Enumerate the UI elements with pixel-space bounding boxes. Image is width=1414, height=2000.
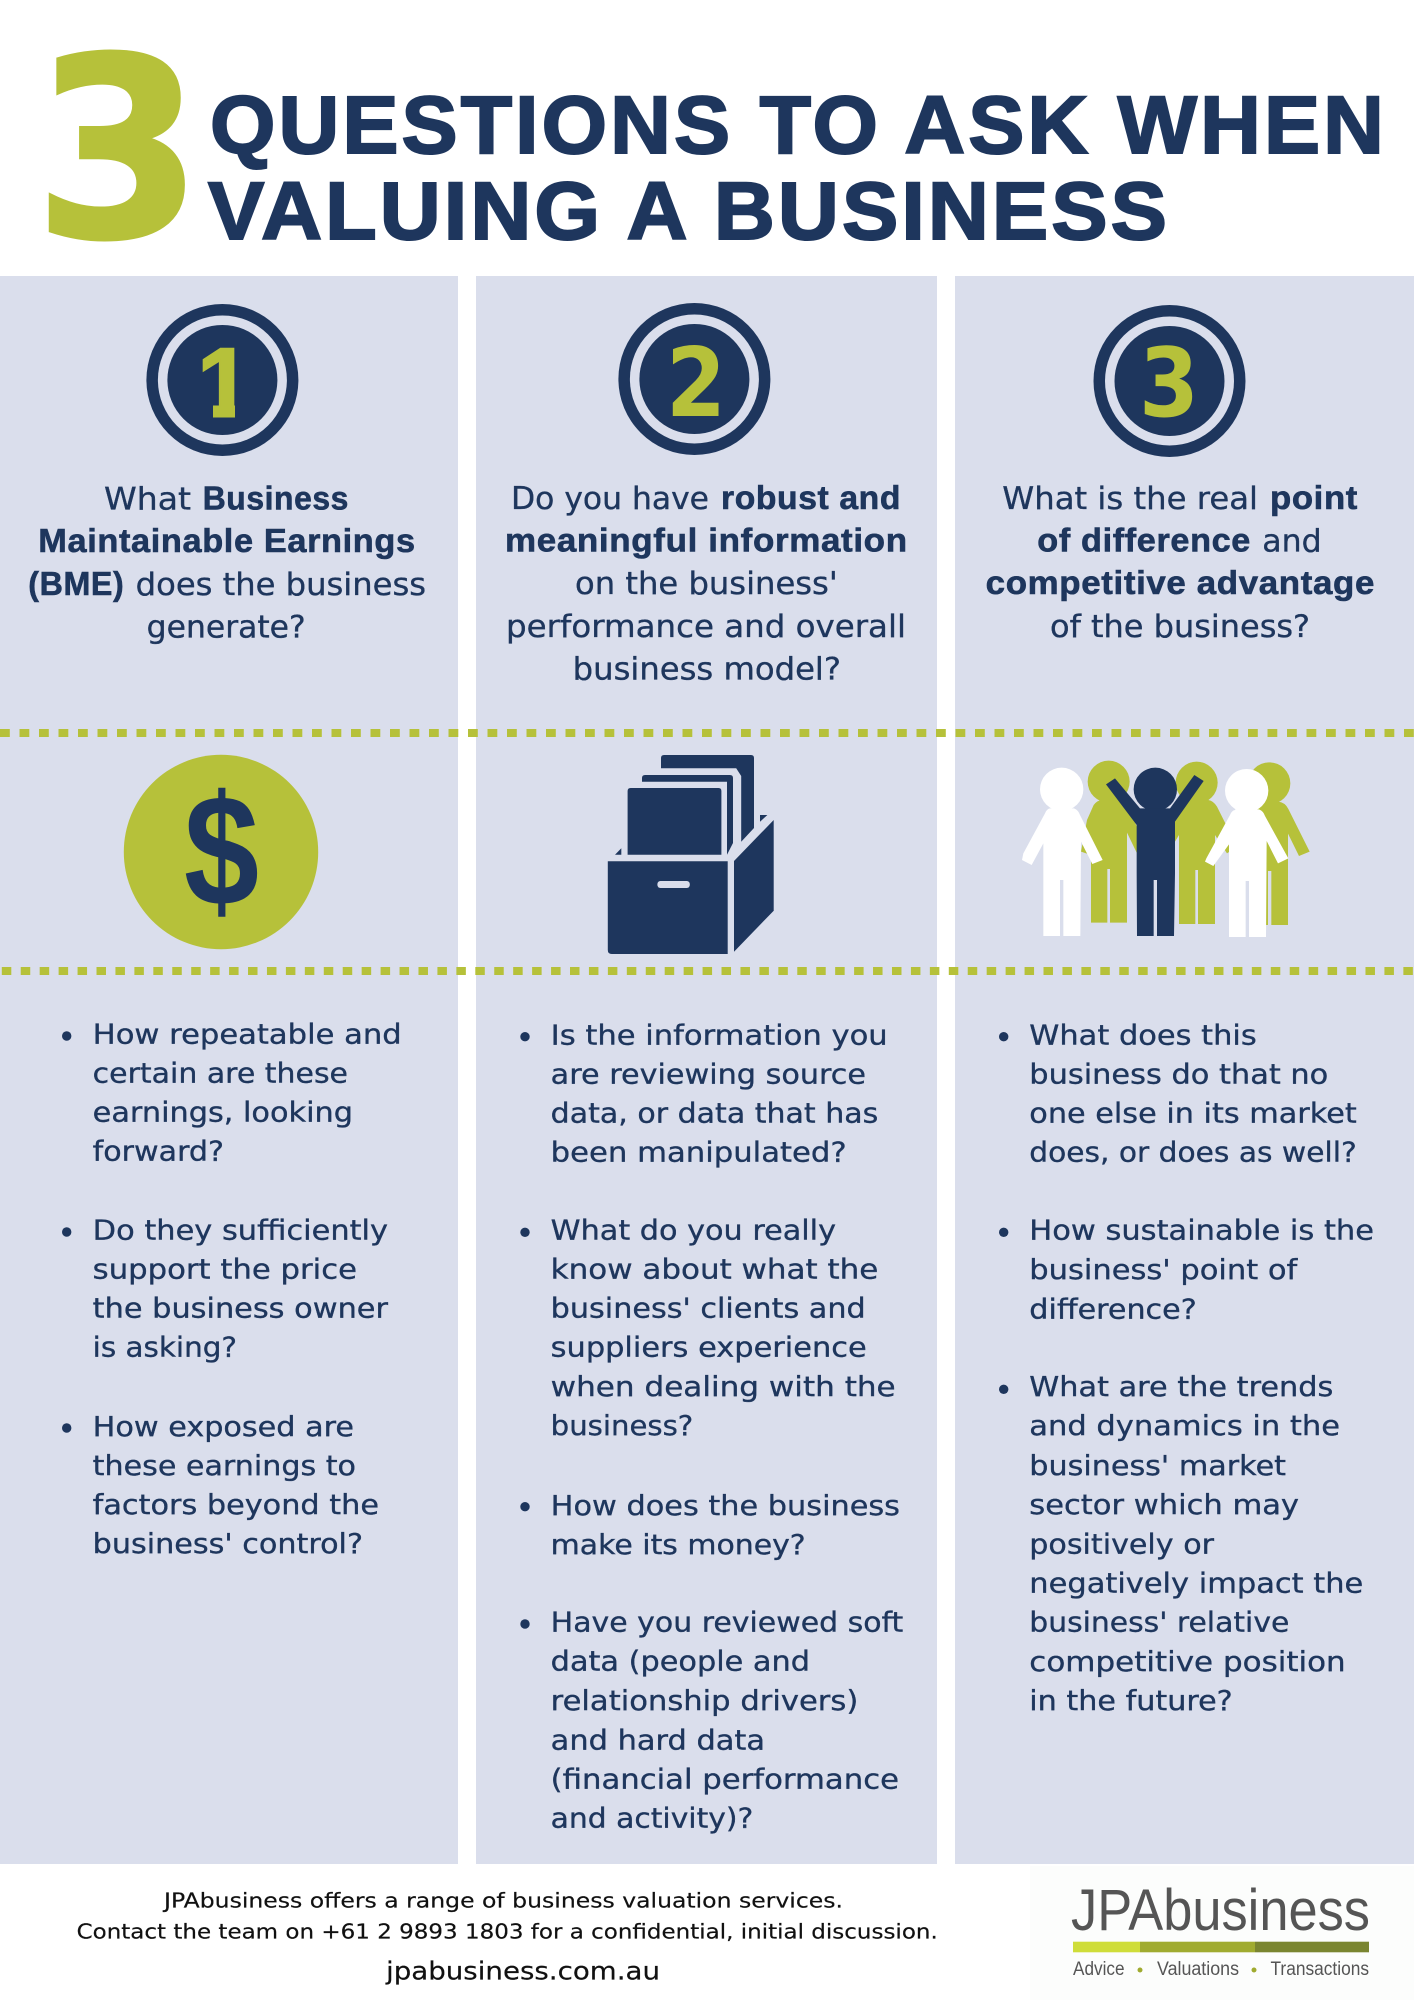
question 3 text: of the business? — [1050, 609, 1310, 645]
bullet list 2: What do you really — [551, 1214, 836, 1247]
drawer handle — [657, 881, 690, 888]
question 2 text: performance and overall — [506, 609, 906, 645]
logo: JPAbusiness: Transactions — [1270, 1959, 1369, 1980]
panel: question 1 — [0, 276, 458, 1864]
person: back centre — [1169, 762, 1237, 924]
question 1 text: Maintainable Earnings — [38, 522, 416, 559]
bullet list 2: Is the information you — [551, 1019, 888, 1052]
question 3 text: point — [1270, 479, 1358, 516]
back file — [661, 755, 754, 842]
left tab — [615, 848, 621, 855]
bullet list 2 — [520, 1019, 903, 1834]
bullet list 3 — [999, 1018, 1374, 1717]
question 2 text: meaningful information — [505, 522, 908, 558]
bullet list 2: Have you reviewed soft — [551, 1606, 903, 1639]
front file — [628, 788, 721, 855]
bullet list 3: competitive position — [1029, 1645, 1346, 1678]
bullet list 1: business' control? — [93, 1527, 363, 1560]
bullet list 1: factors beyond the — [93, 1488, 379, 1521]
icon: number 3 badge: 3 — [1139, 329, 1199, 439]
bullet list 3: What are the trends — [1029, 1370, 1333, 1403]
icon: number 2 badge: 2 — [666, 329, 726, 439]
bullet list 2: when dealing with the — [551, 1370, 896, 1403]
bullet list 3: and dynamics in the — [1029, 1409, 1340, 1442]
bullet list 1: certain are these — [93, 1057, 348, 1090]
bullet list 3: does, or does as well? — [1029, 1136, 1357, 1168]
question 3 text: and — [1262, 524, 1322, 560]
footer message: Contact the team on +61 2 9893 1803 for a confidential, initial discussion. — [77, 1919, 938, 1943]
bullet list 1: Do they sufficiently — [93, 1214, 388, 1247]
question 2 text: Do you have — [511, 481, 709, 517]
bullet list 1: the business owner — [93, 1292, 389, 1325]
footer message: JPAbusiness offers a range of business valuation services. — [162, 1889, 843, 1913]
bullet list 2: relationship drivers) — [551, 1684, 858, 1717]
bullet list 2: know about what the — [551, 1252, 878, 1286]
question 1 text — [28, 480, 426, 646]
logo: JPAbusiness: Valuations — [1157, 1959, 1239, 1980]
bullet list 1: these earnings to — [93, 1449, 356, 1482]
box front — [608, 861, 728, 954]
bullet list 1: forward? — [93, 1134, 224, 1168]
person: back right — [1248, 762, 1310, 925]
bullet list 3: difference? — [1029, 1292, 1197, 1325]
question 3 text: competitive advantage — [986, 564, 1375, 601]
bullet list 3: positively or — [1029, 1527, 1215, 1560]
bullet list 2: business' clients and — [551, 1292, 866, 1325]
panel: question 3 — [955, 276, 1414, 1864]
bullet list 3: business do that no — [1029, 1057, 1328, 1090]
bullet list 3: negatively impact the — [1029, 1566, 1363, 1599]
person: navy centre arms raised — [1106, 768, 1204, 936]
question 2 text: robust and — [721, 479, 901, 516]
bullet list 2: been manipulated? — [551, 1136, 847, 1169]
person: white left — [1022, 768, 1103, 936]
bullet list 3: How sustainable is the — [1029, 1214, 1374, 1246]
icon: number 1 badge — [146, 304, 298, 456]
bullet list 3: in the future? — [1029, 1684, 1233, 1717]
bullet list 2: data (people and — [551, 1645, 810, 1678]
bullet list 3: business' point of — [1029, 1253, 1299, 1286]
right tab — [760, 815, 767, 822]
bullet list 1 — [62, 1018, 402, 1560]
bullet list 2: data, or data that has — [551, 1097, 878, 1130]
bullet list 1: How repeatable and — [93, 1018, 402, 1051]
bullet list 2: How does the business — [551, 1489, 900, 1522]
logo: JPAbusiness: Advice — [1073, 1959, 1124, 1980]
bullet list 2: (financial performance — [551, 1762, 899, 1795]
bullet list 1: earnings, looking — [93, 1096, 353, 1128]
bullet list 1: is asking? — [93, 1331, 237, 1364]
bullet list 2: make its money? — [551, 1528, 806, 1561]
footer message: jpabusiness.com.au — [385, 1956, 660, 1985]
person: back left — [1081, 761, 1147, 923]
bullet list 3: business' market — [1029, 1449, 1286, 1482]
title line 2: VALUING A BUSINESS — [208, 166, 1170, 257]
box side — [734, 820, 774, 952]
bullet list 1: support the price — [93, 1253, 357, 1286]
person: white right — [1205, 769, 1288, 937]
bullet list 3: sector which may — [1029, 1488, 1299, 1521]
question 1 text: Business — [203, 480, 349, 516]
middle file — [642, 775, 733, 855]
icon: group of people — [1022, 761, 1310, 937]
icon: number 3 badge — [1094, 305, 1246, 457]
bullet list 3: business' relative — [1029, 1606, 1289, 1639]
question 2 text: on the business' — [575, 566, 838, 602]
bullet list 3: What does this — [1029, 1018, 1257, 1051]
panel: question 2 — [476, 276, 937, 1864]
title line 1: QUESTIONS TO ASK WHEN — [210, 80, 1387, 171]
icon: number 1 badge: 1 — [197, 328, 252, 438]
icon: dollar coin — [124, 755, 318, 949]
question 1 text: What — [104, 482, 191, 518]
icon: number 2 badge — [618, 303, 770, 455]
question 2 text: business model? — [573, 652, 841, 688]
footer message — [77, 1889, 938, 1985]
question 2 text — [505, 479, 908, 688]
question 3 text — [986, 479, 1375, 645]
title — [34, 5, 1387, 296]
bullet list 2: suppliers experience — [551, 1331, 867, 1364]
logo: JPAbusiness: JPAbusiness — [1071, 1878, 1370, 1943]
bullet list 1: How exposed are — [93, 1410, 354, 1443]
question 1 text: generate? — [147, 610, 306, 646]
question 1 text: does the business — [136, 567, 426, 603]
icon: file box — [608, 755, 774, 954]
bullet list 2: business? — [551, 1409, 693, 1442]
icon: dollar coin: $ — [184, 763, 259, 939]
bullet list 3: one else in its market — [1029, 1096, 1357, 1129]
question 3 text: of difference — [1037, 522, 1251, 558]
question 1 text: (BME) — [28, 565, 124, 602]
bullet list 2: and activity)? — [551, 1801, 753, 1834]
bullet list 2: are reviewing source — [551, 1058, 866, 1090]
question 3 text: What is the real — [1002, 481, 1258, 517]
logo: JPAbusiness — [1030, 1866, 1414, 2000]
big numeral 3: 3 — [34, 5, 203, 296]
bullet list 2: and hard data — [551, 1723, 765, 1756]
